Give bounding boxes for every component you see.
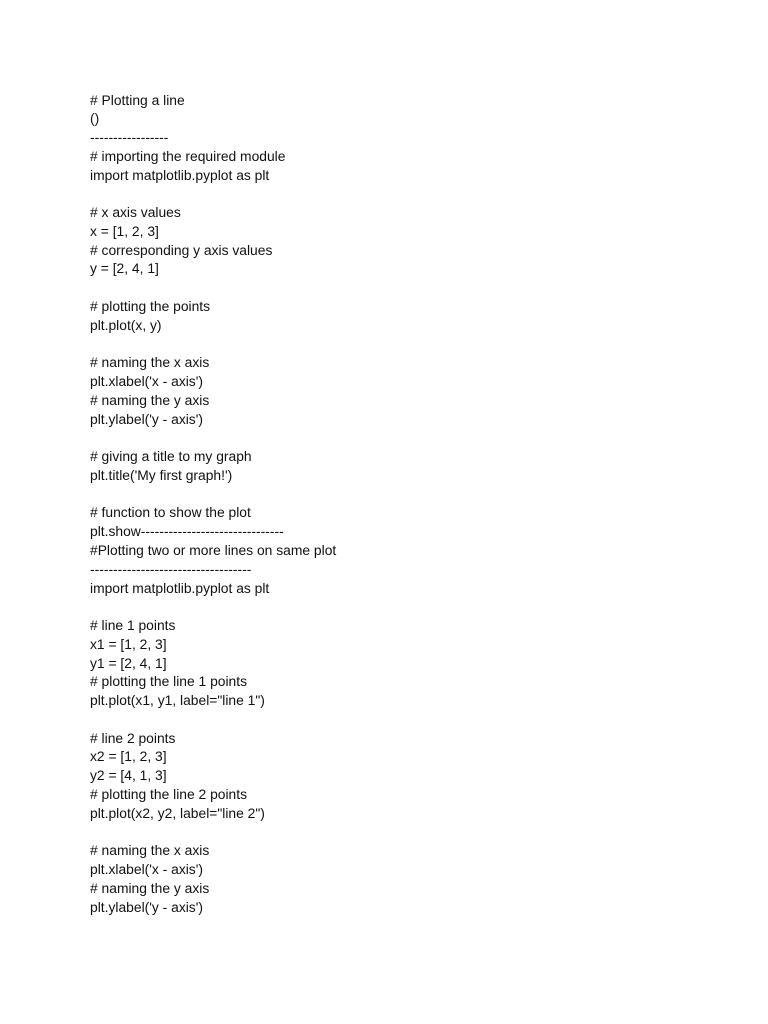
text block: code listing: # Plotting a line () ----------------- # importing the required module import matplotlib.pyplot as plt # x axis values x = [1, 2, 3] # corresponding y axis values y = [2, 4, 1] # plotting the points plt.plot(x, y) # naming the x axis plt.xlabel('x - axis') # naming the y axis plt.ylabel('y - axis') # giving a title to my graph plt.title('My first graph!') # function to show the plot plt.show------------------------------- #Plotting two or more lines on same plot ----------------------------------- import matplotlib.pyplot as plt # line 1 points x1 = [1, 2, 3] y1 = [2, 4, 1] # plotting the line 1 points plt.plot(x1, y1, label="line 1") # line 2 points x2 = [1, 2, 3] y2 = [4, 1, 3] # plotting the line 2 points plt.plot(x2, y2, label="line 2") # naming the x axis plt.xlabel('x - axis') # naming the y axis plt.ylabel('y - axis') xyxy=(90,92,336,915)
